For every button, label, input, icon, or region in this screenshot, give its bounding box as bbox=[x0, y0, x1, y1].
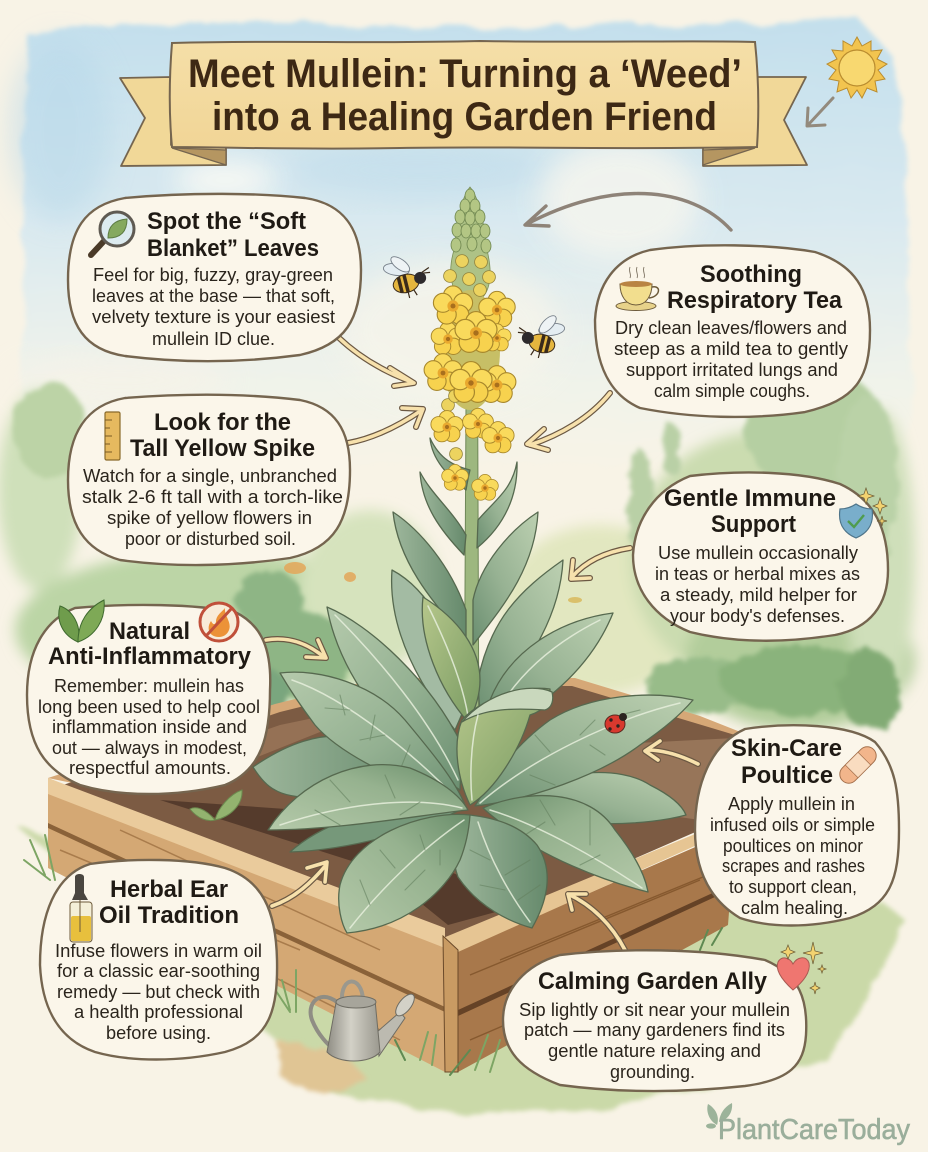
body text: stalk 2-6 ft tall with a torch-like bbox=[82, 487, 343, 507]
icon: shield bbox=[840, 504, 872, 538]
logo: PlantCareToday bbox=[706, 1103, 910, 1146]
body text: gentle nature relaxing and bbox=[548, 1041, 761, 1061]
left fold bbox=[172, 148, 226, 165]
body text: infused oils or simple bbox=[710, 815, 875, 835]
heading: Gentle Immune bbox=[664, 485, 836, 512]
panel: herbal ear oil tradition: Oil Tradition bbox=[99, 902, 239, 929]
banner panel bbox=[170, 41, 758, 149]
green buds bbox=[444, 189, 495, 296]
title text: Meet Mullein: Turning a ‘Weed’ bbox=[188, 52, 742, 96]
watering can bbox=[311, 981, 418, 1061]
panel: tall yellow spike: Tall Yellow Spike bbox=[130, 435, 315, 462]
body text: Apply mullein in bbox=[728, 794, 855, 814]
right fold bbox=[703, 148, 755, 165]
body text: Sip lightly or sit near your mullein bbox=[519, 1000, 790, 1020]
body text: Infuse flowers in warm oil bbox=[55, 941, 262, 961]
back rim bbox=[48, 678, 748, 830]
body text: mullein ID clue. bbox=[152, 329, 275, 349]
body text: respectful amounts. bbox=[69, 758, 231, 778]
panel: soothing respiratory tea: Respiratory Tea bbox=[667, 287, 843, 314]
right ribbon tail bbox=[703, 77, 807, 166]
panel: calming garden ally bbox=[503, 950, 806, 1091]
heading: Natural bbox=[109, 618, 190, 645]
raised garden bed bbox=[48, 678, 748, 1072]
spike base mass bbox=[451, 187, 490, 300]
icon: heart and sparkles bbox=[777, 942, 826, 994]
left ribbon tail bbox=[120, 77, 226, 166]
body text: in teas or herbal mixes as bbox=[655, 564, 860, 584]
panel: herbal ear oil tradition bbox=[40, 860, 277, 1060]
body text: velvety texture is your easiest bbox=[92, 307, 335, 327]
icon: dropper bottle bbox=[70, 874, 92, 942]
bee left bbox=[379, 246, 435, 303]
body text: before using. bbox=[106, 1023, 211, 1043]
watercolor sky bbox=[10, 20, 912, 470]
grass tufts bbox=[24, 835, 722, 1075]
body text: Use mullein occasionally bbox=[658, 543, 858, 563]
left wood wall bbox=[48, 778, 445, 1072]
body text: your body's defenses. bbox=[670, 606, 845, 626]
body text: support irritated lungs and bbox=[626, 360, 838, 380]
arrow: sky curve bbox=[525, 193, 731, 230]
corner post bbox=[443, 936, 458, 1072]
icon: sparkles bbox=[858, 488, 887, 526]
icon: sun bbox=[827, 37, 887, 98]
body text: poor or disturbed soil. bbox=[125, 529, 296, 549]
body text: grounding. bbox=[610, 1062, 695, 1082]
body text: Watch for a single, unbranched bbox=[83, 466, 337, 486]
arrow: sun pointer bbox=[807, 98, 833, 126]
icon: ruler bbox=[105, 412, 120, 460]
icon: teacup bbox=[616, 267, 658, 310]
arrows to plant bbox=[266, 337, 698, 950]
icon: bandage bbox=[836, 743, 880, 787]
bee right bbox=[513, 306, 569, 363]
icon: no-fire symbol bbox=[200, 603, 238, 641]
middle leaves bbox=[327, 560, 613, 790]
heading: Calming Garden Ally bbox=[538, 968, 768, 995]
body text: spike of yellow flowers in bbox=[107, 508, 312, 528]
arrow: yellow spike bbox=[348, 408, 423, 443]
body text: poultices on minor bbox=[723, 836, 863, 856]
ground wash bbox=[20, 830, 905, 1118]
arrow: spot leaves bbox=[338, 337, 414, 386]
flower cluster backing bbox=[440, 290, 500, 410]
panel: tall yellow spike bbox=[68, 395, 350, 565]
body text: out — always in modest, bbox=[52, 738, 247, 758]
icon: green leaves bbox=[59, 600, 104, 642]
panel: natural anti-inflammatory bbox=[27, 600, 270, 794]
panel: natural anti-inflammatory: Anti-Inflammatory bbox=[48, 643, 252, 670]
heading: Soothing bbox=[700, 261, 802, 288]
large mid leaves bbox=[253, 672, 693, 852]
arrow: anti-inflammatory bbox=[266, 639, 326, 658]
arrow: calming bbox=[568, 894, 625, 950]
body text: patch — many gardeners find its bbox=[524, 1020, 785, 1040]
sprout bbox=[190, 790, 242, 821]
yellow flowers bbox=[424, 286, 516, 500]
body text: to support clean, bbox=[729, 877, 857, 897]
body text: a health professional bbox=[74, 1002, 243, 1022]
body text: steep as a mild tea to gently bbox=[614, 339, 848, 359]
logo: PlantCareToday: PlantCareToday bbox=[718, 1114, 910, 1146]
heading: Spot the “Soft bbox=[147, 208, 306, 235]
arrow: poultice bbox=[645, 741, 698, 764]
flower spike bbox=[424, 187, 516, 500]
icon: magnifier bbox=[91, 212, 134, 255]
panel: gentle immune support bbox=[633, 472, 888, 641]
arrow: ear oil bbox=[272, 862, 327, 906]
body text: long been used to help cool bbox=[38, 697, 260, 717]
panel: soothing respiratory tea bbox=[595, 245, 870, 417]
tan soil wash bbox=[278, 1040, 370, 1092]
panel: spot the soft blanket leaves bbox=[68, 194, 361, 361]
soil bbox=[60, 686, 735, 940]
heading: Skin-Care bbox=[731, 735, 842, 762]
panel: spot the soft blanket leaves: Blanket” Leaves bbox=[147, 235, 319, 262]
right wood wall bbox=[458, 835, 735, 1072]
stem and upper leaves bbox=[393, 215, 538, 780]
mullein plant bbox=[253, 215, 693, 933]
body text: remedy — but check with bbox=[57, 982, 260, 1002]
heading: Look for the bbox=[154, 409, 291, 436]
body text: a steady, mild helper for bbox=[660, 585, 857, 605]
background garden greenery bbox=[0, 368, 915, 730]
body text: calm simple coughs. bbox=[654, 381, 810, 401]
panel: skin-care poultice bbox=[695, 725, 899, 926]
body text: Remember: mullein has bbox=[54, 676, 244, 696]
ladybug bbox=[605, 713, 627, 733]
arrow: immune bbox=[571, 548, 630, 579]
body text: scrapes and rashes bbox=[722, 856, 865, 876]
body text: inflammation inside and bbox=[52, 717, 247, 737]
heading: Herbal Ear bbox=[110, 876, 228, 903]
arrow: tea bbox=[527, 393, 610, 450]
body text: calm healing. bbox=[741, 898, 848, 918]
large front leaves bbox=[268, 765, 648, 933]
panel: gentle immune support: Support bbox=[711, 511, 796, 538]
body text: Dry clean leaves/flowers and bbox=[615, 318, 847, 338]
body text: Feel for big, fuzzy, gray-green bbox=[93, 265, 333, 285]
title banner bbox=[120, 41, 807, 166]
body text: leaves at the base — that soft, bbox=[92, 286, 335, 306]
body text: for a classic ear-soothing bbox=[57, 961, 260, 981]
title banner: into a Healing Garden Friend bbox=[212, 95, 717, 139]
panel: skin-care poultice: Poultice bbox=[741, 762, 833, 789]
